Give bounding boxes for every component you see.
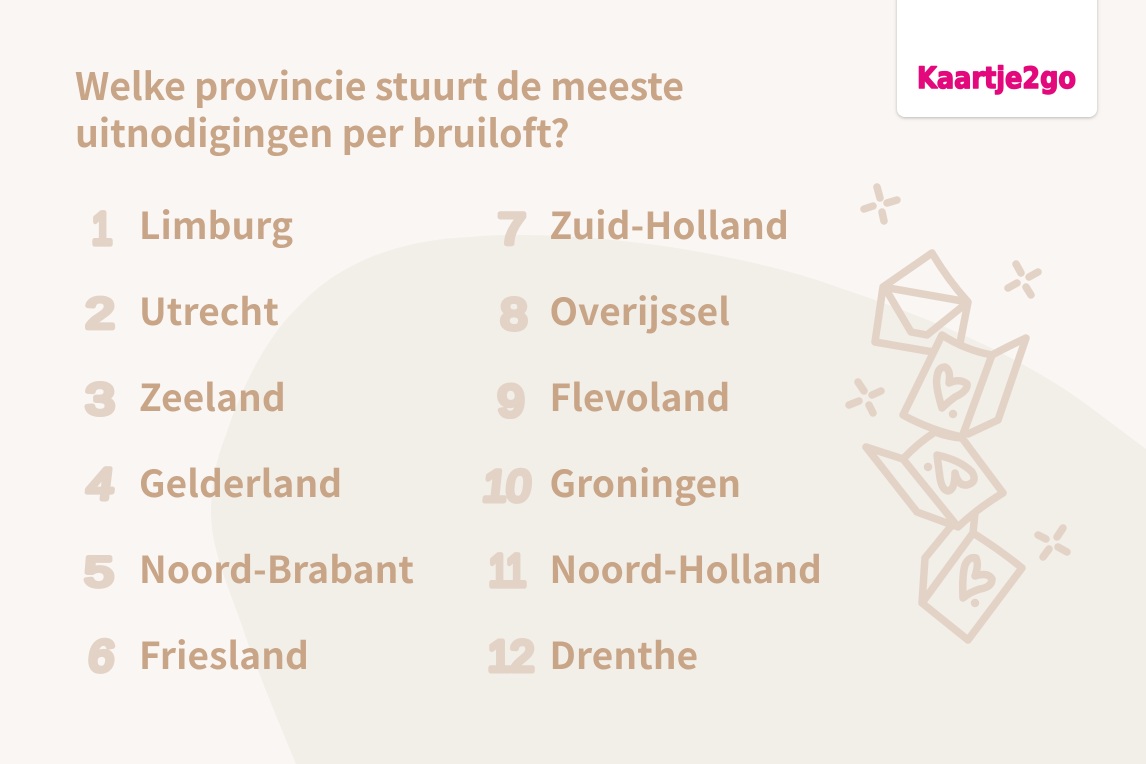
rank 8 Overijssel: Overijssel [550,282,730,336]
rank 10 Groningen: Groningen [550,454,741,508]
rank 6 Friesland: 6 [86,631,117,681]
rank 4 Gelderland: 4 [84,459,117,508]
rank 2 Utrecht [85,282,279,338]
icon: folded card bottom [922,513,1022,640]
icon: heart bottom [963,558,992,598]
icon: sparkle right [1008,264,1038,295]
rank 9 Flevoland: Flevoland [550,368,730,422]
title: Welke provincie stuurt de meeste [75,56,684,111]
ranking column 2 [480,196,822,681]
icon: dot middle [924,463,932,471]
rank 11 Noord-Holland: Noord-Holland [550,540,822,594]
rank 11 Noord-Holland: 11 [488,545,526,596]
icon: sparkle top [864,187,897,221]
rank 6 Friesland: Friesland [139,626,309,680]
icon: open envelope [875,253,968,352]
rank 12 Drenthe [488,626,698,681]
icon: dot top [949,410,957,418]
ranking column 1 [84,196,414,681]
title: uitnodigingen per bruiloft? [75,103,570,158]
rank 5 Noord-Brabant: 5 [84,549,114,596]
icon: heart top [937,367,967,408]
background blob [211,235,1146,764]
rank 3 Zeeland: Zeeland [139,368,286,422]
logo wordmark: Kaartje2go [917,61,1076,95]
icon: folded card top [903,335,1026,437]
logo card [897,0,1097,117]
illustration: envelope and cards [849,187,1067,640]
icon: sparkle left [849,382,881,413]
icon: dot bottom [971,599,979,607]
rank 4 Gelderland: Gelderland [139,454,342,508]
rank 12 Drenthe: 12 [488,632,533,681]
icon: sparkle lower right [1038,528,1067,557]
icon: heart middle [937,455,974,491]
rank 1 Limburg: Limburg [139,196,293,250]
rank 10 Groningen [480,454,741,511]
rank 8 Overijssel: 8 [501,289,527,339]
rank 1 Limburg: 1 [92,203,112,254]
rank 2 Utrecht: 2 [85,291,115,338]
rank 2 Utrecht: Utrecht [139,282,279,336]
rank 7 Zuid-Holland: Zuid-Holland [550,196,789,250]
rank 9 Flevoland: 9 [498,376,524,426]
icon: folded card middle [866,432,1003,527]
rank 7 Zuid-Holland: 7 [498,205,526,254]
rank 10 Groningen: 10 [480,462,533,511]
rank 12 Drenthe: Drenthe [550,626,698,680]
rank 5 Noord-Brabant: Noord-Brabant [139,540,414,594]
rank 3 Zeeland: 3 [85,375,115,424]
